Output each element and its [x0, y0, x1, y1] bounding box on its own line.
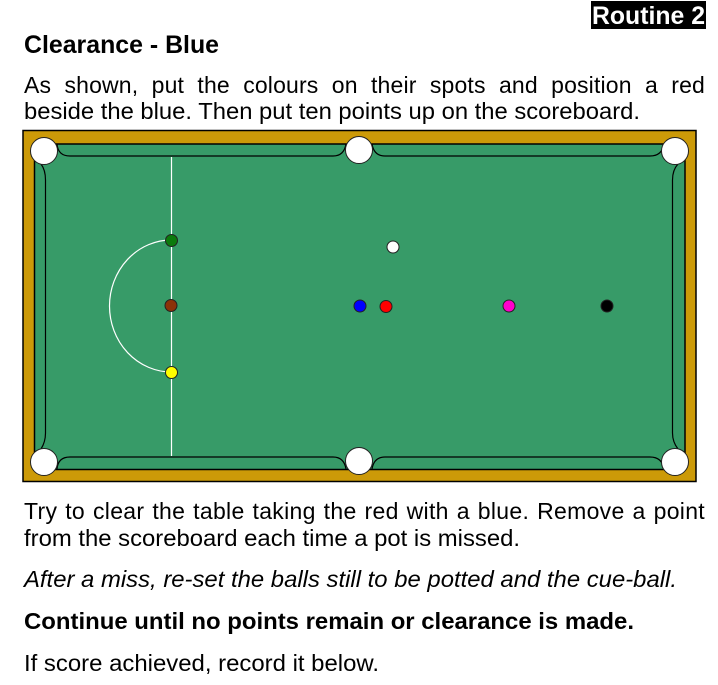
- yellow ball: [166, 366, 178, 378]
- intro text line 1: As shown, put the colours on their spots and position a red: [24, 72, 705, 98]
- routine label: Routine 2: [592, 2, 705, 30]
- baize: [34, 144, 685, 470]
- italic note: After a miss, re-set the balls still to be potted and the cue-ball.: [22, 566, 677, 592]
- closing note: If score achieved, record it below.: [24, 650, 379, 676]
- instruction text line 2: from the scoreboard each time a pot is missed.: [24, 525, 520, 551]
- cue ball: [387, 241, 399, 253]
- blue ball: [354, 300, 366, 312]
- snooker table: [23, 130, 696, 482]
- table frame: [23, 130, 696, 482]
- baulk line and D: [110, 157, 172, 456]
- pockets: [30, 136, 688, 476]
- brown ball: [165, 300, 177, 312]
- heading: Clearance - Blue: [24, 31, 219, 59]
- instruction text line 1: Try to clear the table taking the red with a blue. Remove a point: [24, 498, 705, 524]
- red ball: [380, 300, 392, 312]
- green ball: [166, 234, 178, 246]
- cushion lines: [41, 144, 678, 469]
- black ball: [601, 300, 613, 312]
- intro text line 2: beside the blue. Then put ten points up on the scoreboard.: [24, 98, 640, 124]
- pink ball: [503, 300, 515, 312]
- bold instruction: Continue until no points remain or clearance is made.: [24, 608, 634, 634]
- balls: [165, 234, 613, 378]
